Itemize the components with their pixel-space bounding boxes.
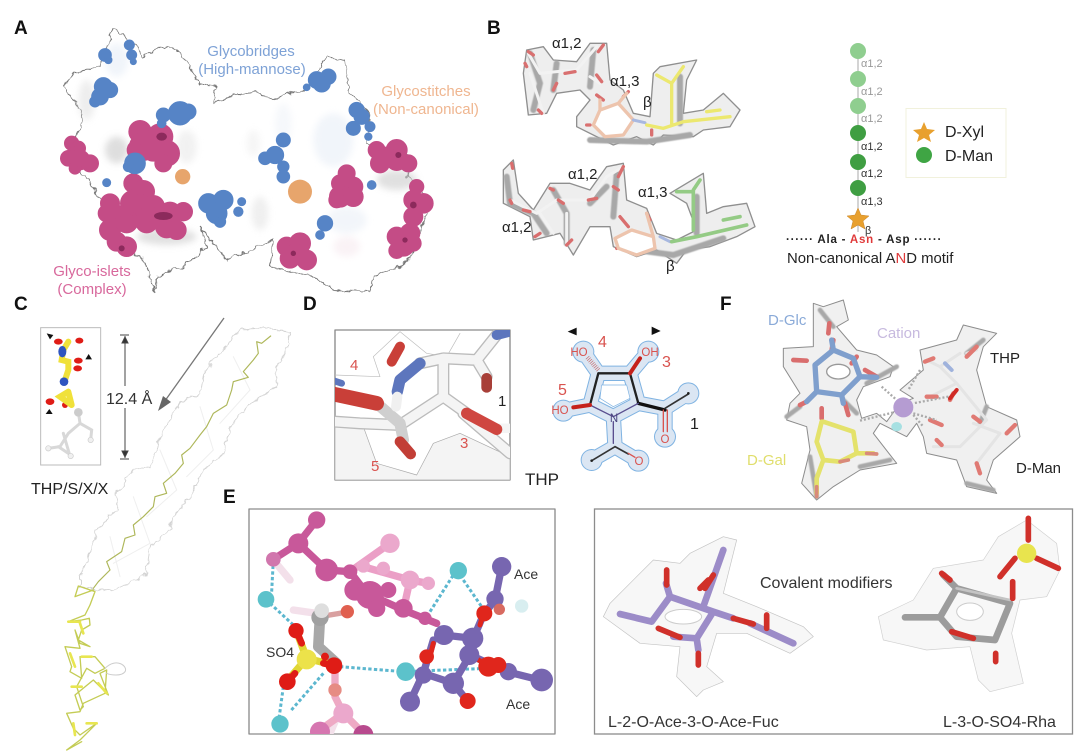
label: L-2-O-Ace-3-O-Ace-Fuc: L-2-O-Ace-3-O-Ace-Fuc [608,714,779,731]
glycan clusters: glycobridges (blue) [90,40,376,239]
labels: D-Gal [747,452,786,469]
glycan chain diagram: α1,3 [861,196,883,208]
label: L-3-O-SO4-Rha: L-3-O-SO4-Rha [943,714,1056,731]
chemical structure position numbers: 1 [690,416,699,433]
glycan chain diagram: α1,2 [861,86,883,98]
label: covalent modifiers: Covalent modifiers [760,575,892,592]
panel: covalent modifiers [594,509,1072,734]
ball and stick model box [249,509,555,745]
chemical structure atom labels: HO [551,405,569,417]
panel E: interaction network [223,487,555,745]
labels: D-Man [1016,460,1061,477]
density box numbers: 3 [460,435,468,452]
labels: Ace [514,566,538,582]
panel B: density maps and glycan chain [487,18,1006,275]
disordered tail (yellow) [65,586,126,750]
arrow to inset [158,318,224,411]
chemical structure position numbers: 4 [598,334,607,351]
dimension bracket [120,335,129,459]
density maps and sticks [783,300,1020,500]
panel letter D: D [303,294,317,315]
protein surface outline [63,28,430,292]
chemical structure of THP [552,327,699,472]
glycan chain diagram: α1,2 [861,168,883,180]
chemical structure atom labels: N [610,413,618,425]
labels: THP [990,350,1020,367]
linkage labels on density maps: β [666,258,675,275]
inset box with peptide [41,328,101,465]
legend [906,108,1006,178]
linkage labels on density maps: β [643,94,652,111]
label: THP/S/X/X: THP/S/X/X [31,481,109,498]
glycan clusters: glyco-islets (pink) [62,122,432,269]
labels: SO4 [266,644,294,660]
label: glycobridges: Glycobridges [207,43,295,60]
panel D: THP density and structure [303,294,699,489]
legend: D-Xyl [945,124,984,141]
label: glyco-islets: Glyco-islets [53,263,131,280]
peptide backbone zigzag [93,336,271,588]
label: glyco-islets: (Complex) [57,281,127,298]
panel C: fibril and THP/S/X/X [14,294,290,750]
chemical structure position numbers: 3 [662,354,671,371]
box frame [594,509,1072,734]
glycan chain diagram: α1,2 [861,58,883,70]
glycan chain diagram [847,43,883,237]
density box numbers: 1 [498,393,506,410]
chemical structure position numbers [558,334,699,433]
panel letter B: B [487,18,501,39]
chemical structure atom labels: OH [641,347,659,359]
chemical structure atom labels: HO [570,347,588,359]
linkage labels on density maps: α1,3 [610,73,640,90]
glycan chain diagram: β [865,225,871,237]
glycan chain diagram: α1,2 [861,113,883,125]
label: glycobridges: (High-mannose) [198,61,306,78]
density with L-3-O-SO4-Rha model [878,518,1060,692]
linkage labels on density maps: α1,2 [568,166,598,183]
icon: xylose star [847,208,869,229]
glycan clusters: glycostitches (orange) [175,169,312,204]
label: glycostitches: (Non-canonical) [373,101,479,118]
sequence motif: ······ Ala - Asn - Asp ······ [786,234,942,246]
chemical structure atom labels: O [661,434,670,446]
glycan chain diagram: α1,2 [861,141,883,153]
chemical structure position numbers: 5 [558,382,567,399]
labels: Ace [506,696,530,712]
density map: lower [503,160,755,263]
labels: Cation [877,325,920,342]
panel F: cation coordination [720,294,1061,500]
chemical structure atom labels: O [635,456,644,468]
labels: D-Glc [768,312,807,329]
panel letter F: F [720,294,732,315]
label: glycostitches: Glycostitches [381,83,471,100]
labels [266,566,538,712]
density map: upper [523,43,740,145]
density box numbers: 4 [350,357,358,374]
legend: D-Man [945,148,993,165]
panel letter E: E [223,487,236,508]
panel A: glycan map on protein [14,18,479,298]
linkage labels on density maps [502,35,675,275]
labels [747,312,1061,477]
linkage labels on density maps: α1,2 [552,35,582,52]
fibril surface [80,328,290,592]
panel letter C: C [14,294,28,315]
density box numbers: 5 [371,458,379,475]
density with L-2-O-Ace-3-O-Ace-Fuc model [603,537,813,697]
label: THP: THP [525,470,559,489]
chemical structure atom labels [551,347,670,468]
density box numbers [350,357,506,475]
linkage labels on density maps: α1,3 [638,184,668,201]
linkage labels on density maps: α1,2 [502,219,532,236]
density box [330,330,513,480]
label: 12.4 angstrom: 12.4 Å [106,389,153,408]
panel letter A: A [14,18,28,39]
motif caption: Non-canonical AND motif [787,251,954,267]
